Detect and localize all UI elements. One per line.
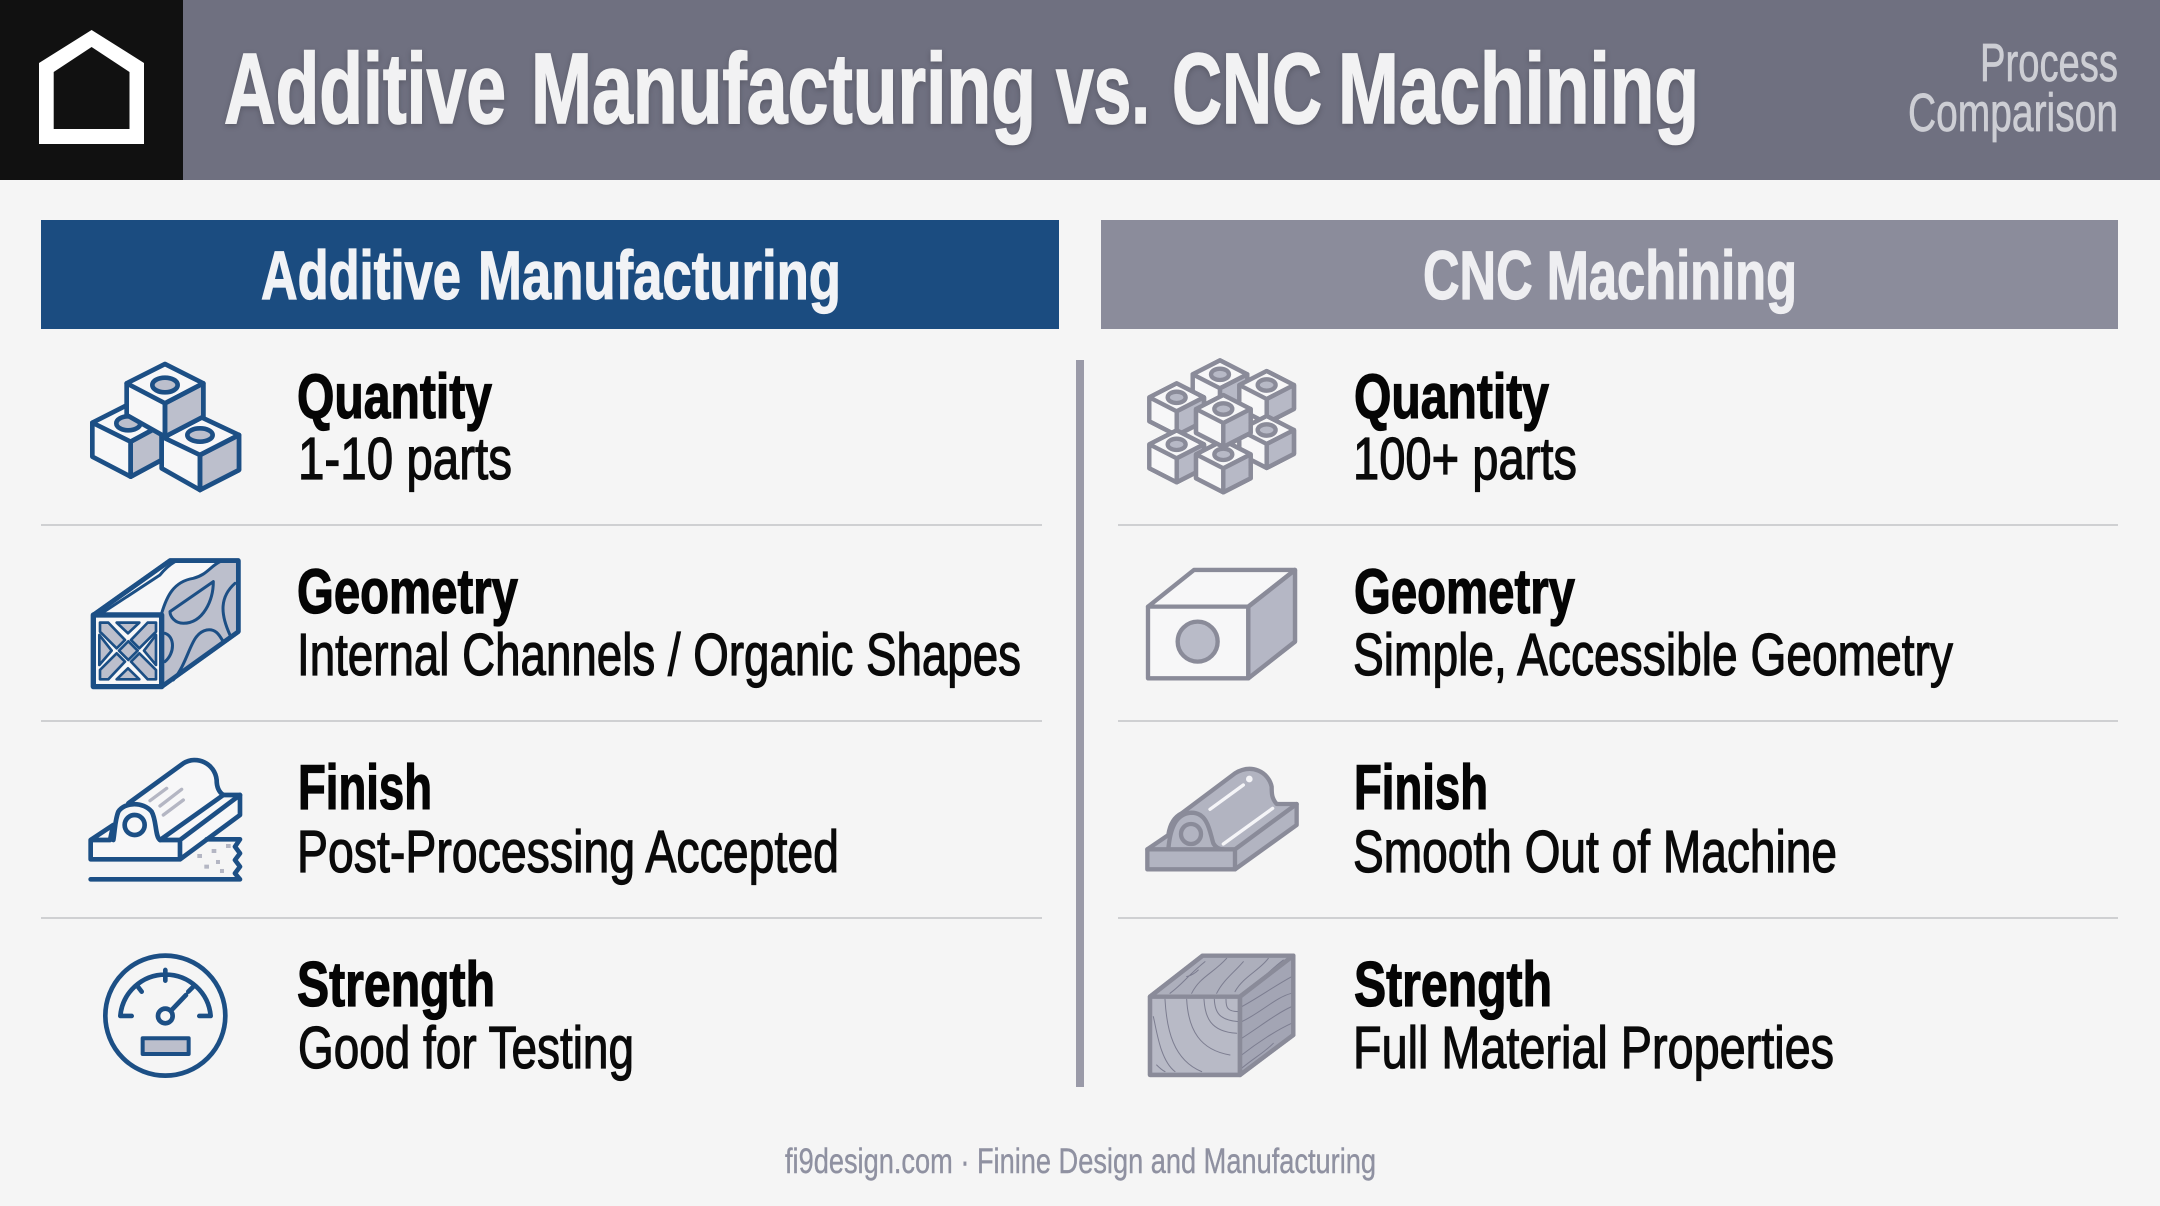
text: finish: Finish <box>298 753 432 823</box>
title <box>224 33 1699 145</box>
text: geometry: Simple, Accessible Geometry <box>1353 622 1953 688</box>
row: finish <box>91 753 839 885</box>
icon: many cubes <box>1149 360 1294 492</box>
text: quantity: 100+ parts <box>1353 426 1577 492</box>
text: finish <box>1353 753 1837 885</box>
text: geometry <box>297 557 1021 688</box>
row: strength <box>1150 950 1834 1081</box>
text: strength: Good for Testing <box>298 1015 634 1081</box>
text: geometry <box>1353 557 1953 688</box>
text: strength: Full Material Properties <box>1353 1015 1834 1081</box>
icon: lattice block with organic channels <box>93 561 238 687</box>
column heading: cnc machining <box>1101 220 2118 329</box>
panel: additive manufacturing <box>41 220 1059 1081</box>
column heading: cnc machining: CNC Machining <box>1423 237 1797 314</box>
column heading: additive manufacturing: Manufacturing <box>478 237 841 314</box>
icon: smooth machined part <box>1147 769 1297 869</box>
row: finish <box>1147 753 1837 885</box>
title: CNC <box>1172 33 1322 145</box>
icon: simple block with hole <box>1148 570 1295 678</box>
text: strength <box>297 950 634 1081</box>
text: quantity <box>297 362 512 492</box>
column heading: additive manufacturing <box>41 220 1059 329</box>
icon: gauge <box>105 956 225 1076</box>
text: quantity: Quantity <box>297 362 492 432</box>
text: geometry: Internal Channels / Organic Shapes <box>297 622 1021 688</box>
text: quantity <box>1353 362 1577 492</box>
text: finish <box>297 753 839 885</box>
text: strength: Strength <box>1354 950 1552 1020</box>
text: quantity: 1-10 parts <box>298 426 512 492</box>
icon: solid grained billet <box>1150 956 1293 1075</box>
title: Machining <box>1338 33 1699 145</box>
icon: rough printed part <box>91 760 240 879</box>
text: geometry: Geometry <box>297 557 518 627</box>
text: finish: Finish <box>1354 753 1488 823</box>
title: vs. <box>1056 33 1150 145</box>
text: quantity: Quantity <box>1354 362 1549 432</box>
panel: cnc machining <box>1101 220 2118 1081</box>
title: Manufacturing <box>531 33 1036 145</box>
footer credit: fi9design.com · Finine Design and Manufacturing <box>785 1142 1376 1181</box>
icon: three cubes <box>92 364 239 490</box>
row: strength <box>105 950 634 1081</box>
text: geometry: Geometry <box>1354 557 1575 627</box>
text: strength: Strength <box>297 950 495 1020</box>
row: geometry <box>93 557 1021 688</box>
row: quantity <box>1149 360 1577 492</box>
center divider <box>1076 360 1084 1087</box>
row: geometry <box>1148 557 1953 688</box>
column heading: additive manufacturing: Additive <box>261 237 461 314</box>
icon: house outline <box>39 30 144 144</box>
header tag: process comparison <box>1908 33 2118 143</box>
row: quantity <box>92 362 512 492</box>
title: Additive <box>224 33 506 145</box>
text: finish: Post-Processing Accepted <box>297 819 839 885</box>
logo block <box>0 0 183 180</box>
header band <box>0 0 2160 180</box>
text: strength <box>1353 950 1834 1081</box>
text: finish: Smooth Out of Machine <box>1353 819 1837 885</box>
